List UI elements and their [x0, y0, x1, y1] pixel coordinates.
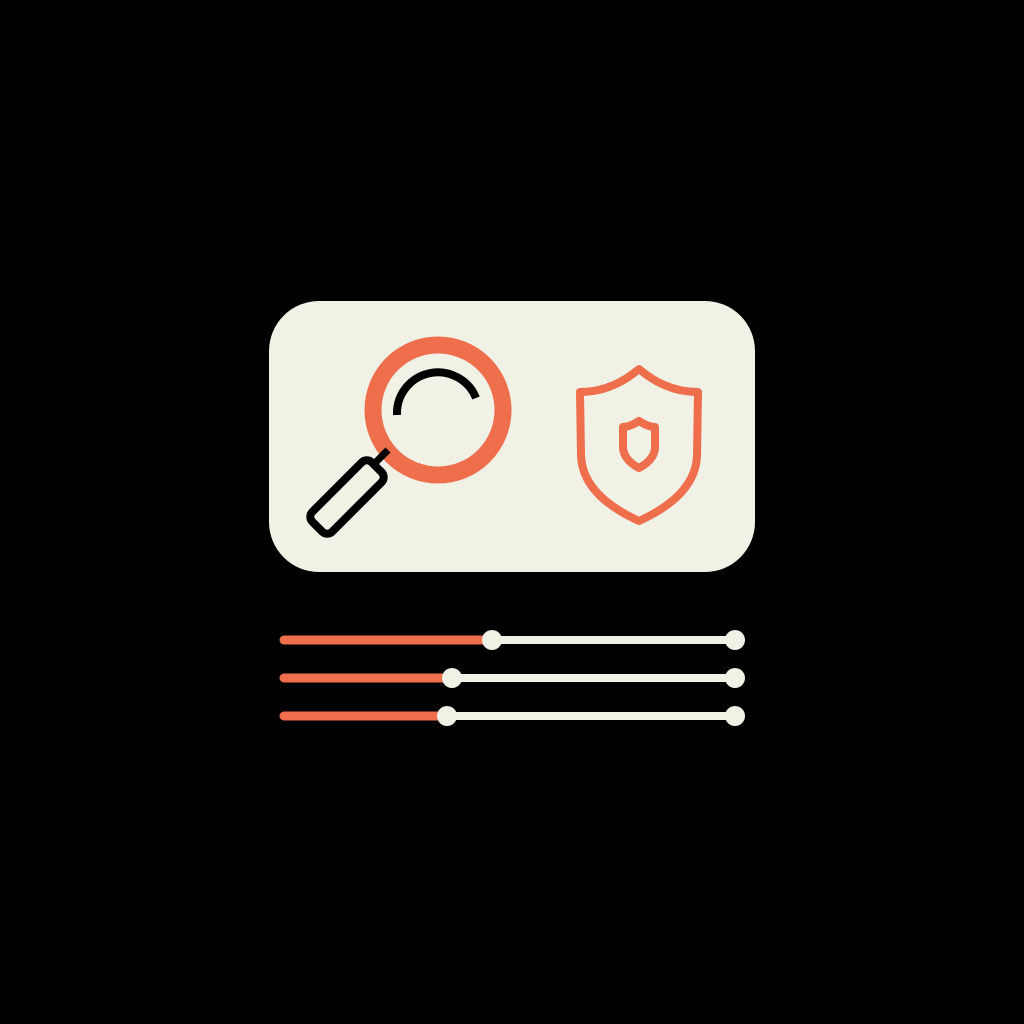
icon: shield	[580, 369, 698, 521]
slider 2	[284, 668, 745, 688]
slider 1	[284, 630, 745, 650]
panel: card	[269, 301, 755, 572]
slider 3	[284, 706, 745, 726]
icon: magnifying glass	[307, 345, 503, 537]
